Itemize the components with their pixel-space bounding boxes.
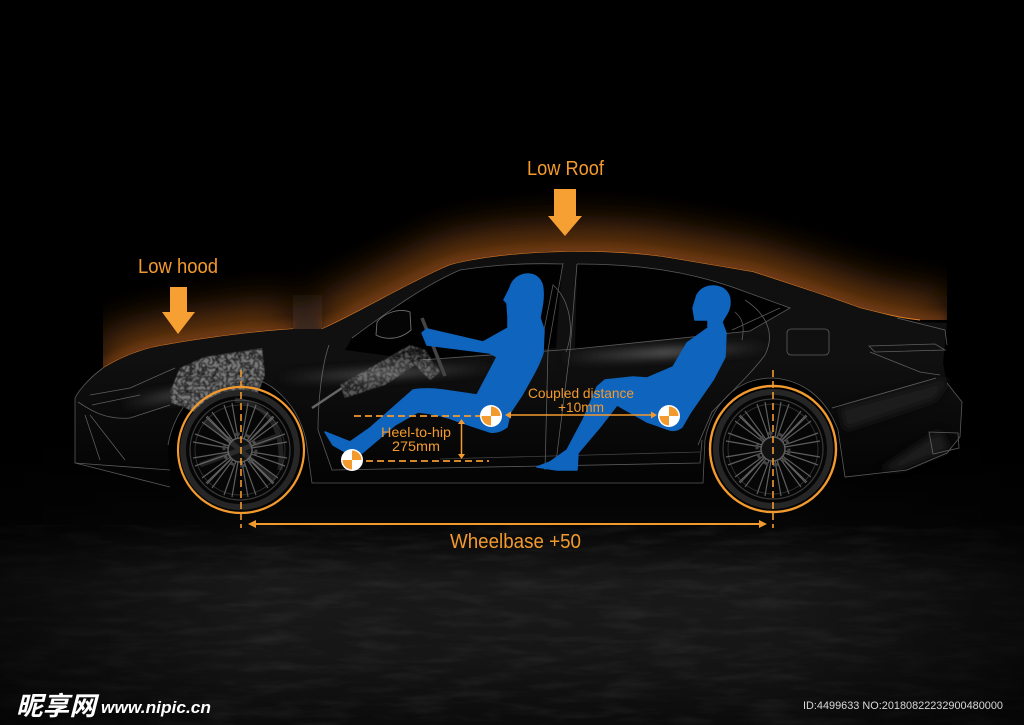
label: wheelbase: Wheelbase +50 — [450, 531, 581, 553]
windows — [345, 264, 562, 360]
watermark logo: 昵享网 — [16, 691, 100, 721]
arrow: low hood — [162, 287, 195, 334]
seating reference markers — [341, 405, 680, 471]
steering wheel — [422, 318, 445, 376]
orange roofline glow — [103, 252, 947, 368]
heel line — [366, 460, 489, 462]
label: heel-to-hip: 275mm — [392, 438, 440, 454]
arrowheads — [248, 412, 767, 528]
body highlights — [120, 342, 950, 470]
label: coupled distance: Coupled distance — [528, 385, 634, 401]
label: low roof: Low Roof — [527, 158, 604, 180]
car silhouette — [75, 252, 962, 487]
label: coupled distance — [528, 385, 634, 415]
driver figure — [325, 274, 544, 453]
steering column — [312, 345, 440, 408]
coupled distance arrow — [509, 414, 652, 416]
watermark id: ID:4499633 NO:20180822232900480000 — [803, 700, 1003, 712]
infographic canvas — [0, 160, 1024, 725]
label: coupled distance: +10mm — [558, 399, 604, 415]
wheelbase arrow — [253, 523, 762, 525]
watermark logo: www.nipic.cn — [101, 698, 211, 717]
rear wheel — [710, 386, 836, 512]
rear passenger figure — [537, 286, 730, 470]
roofline edge — [103, 252, 920, 368]
dimension lines — [241, 370, 773, 528]
label: low hood: Low hood — [138, 256, 218, 278]
engine bay — [170, 348, 265, 412]
front wheel — [178, 387, 304, 513]
outline details — [75, 263, 962, 487]
label: heel-to-hip — [381, 424, 451, 454]
side mirror — [376, 310, 411, 338]
heel-to-hip arrow — [460, 423, 462, 455]
rear axle line — [772, 370, 774, 528]
arrow: low roof — [548, 189, 582, 236]
label: heel-to-hip: Heel-to-hip — [381, 424, 451, 440]
hip line — [354, 415, 482, 417]
car body — [75, 252, 962, 487]
watermark logo — [16, 691, 211, 721]
front axle line — [240, 370, 242, 528]
